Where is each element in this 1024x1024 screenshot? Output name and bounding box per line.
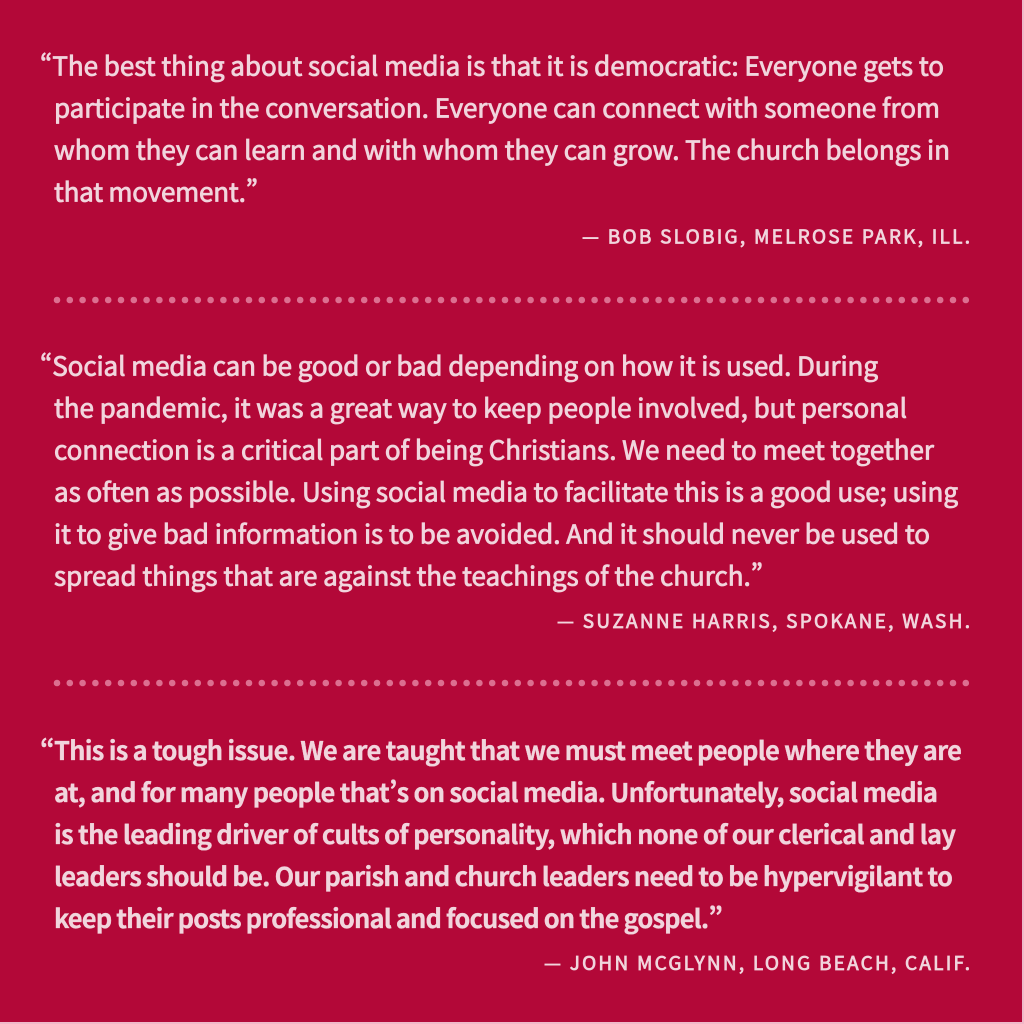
quote 2 text: spread things that are against the teachings of the church.” (54, 556, 763, 594)
quote 1: Bob Slobig (40, 46, 970, 250)
quote 2 text: connection is a critical part of being Christians. We need to meet together (54, 430, 935, 468)
quote 3 text: is the leading driver of cults of personality, which none of our clerical and lay (54, 815, 956, 852)
quote 1 text: “The best thing about social media is that it is democratic: Everyone gets to (40, 46, 944, 84)
quote 1 text: that movement.” (54, 172, 258, 210)
quote 1 text: participate in the conversation. Everyone can connect with someone from (54, 88, 940, 126)
quote 1 text (40, 46, 950, 210)
quote 2 text: as often as possible. Using social media to facilitate this is a good use; using (54, 472, 958, 510)
quote 1 text: whom they can learn and with whom they can grow. The church belongs in (54, 130, 950, 168)
dotted divider 2 (57, 680, 968, 686)
quote 3 text: leaders should be. Our parish and church leaders need to be hypervigilant to (54, 857, 953, 894)
quote 2 text: the pandemic, it was a great way to keep people involved, but personal (54, 388, 907, 426)
quote 3: John McGlynn (40, 731, 970, 976)
quote 1 attribution: — BOB SLOBIG, MELROSE PARK, ILL. (582, 222, 970, 250)
quote 2 text: “Social media can be good or bad depending on how it is used. During (40, 346, 878, 384)
quote 3 attribution: — JOHN MCGLYNN, LONG BEACH, CALIF. (544, 949, 970, 976)
quote 3 text (40, 731, 962, 936)
quote 2: Suzanne Harris (40, 346, 970, 634)
quote 3 text: at, and for many people that’s on social media. Unfortunately, social media (54, 773, 938, 810)
quote 2 text (40, 346, 958, 594)
quote 2 text: it to give bad information is to be avoided. And it should never be used to (54, 514, 930, 552)
quote 3 text: keep their posts professional and focused on the gospel.” (54, 899, 723, 936)
quote 3 text: “This is a tough issue. We are taught that we must meet people where they are (40, 731, 962, 768)
quote 2 attribution: — SUZANNE HARRIS, SPOKANE, WASH. (557, 607, 970, 634)
dotted divider 1 (57, 297, 968, 303)
